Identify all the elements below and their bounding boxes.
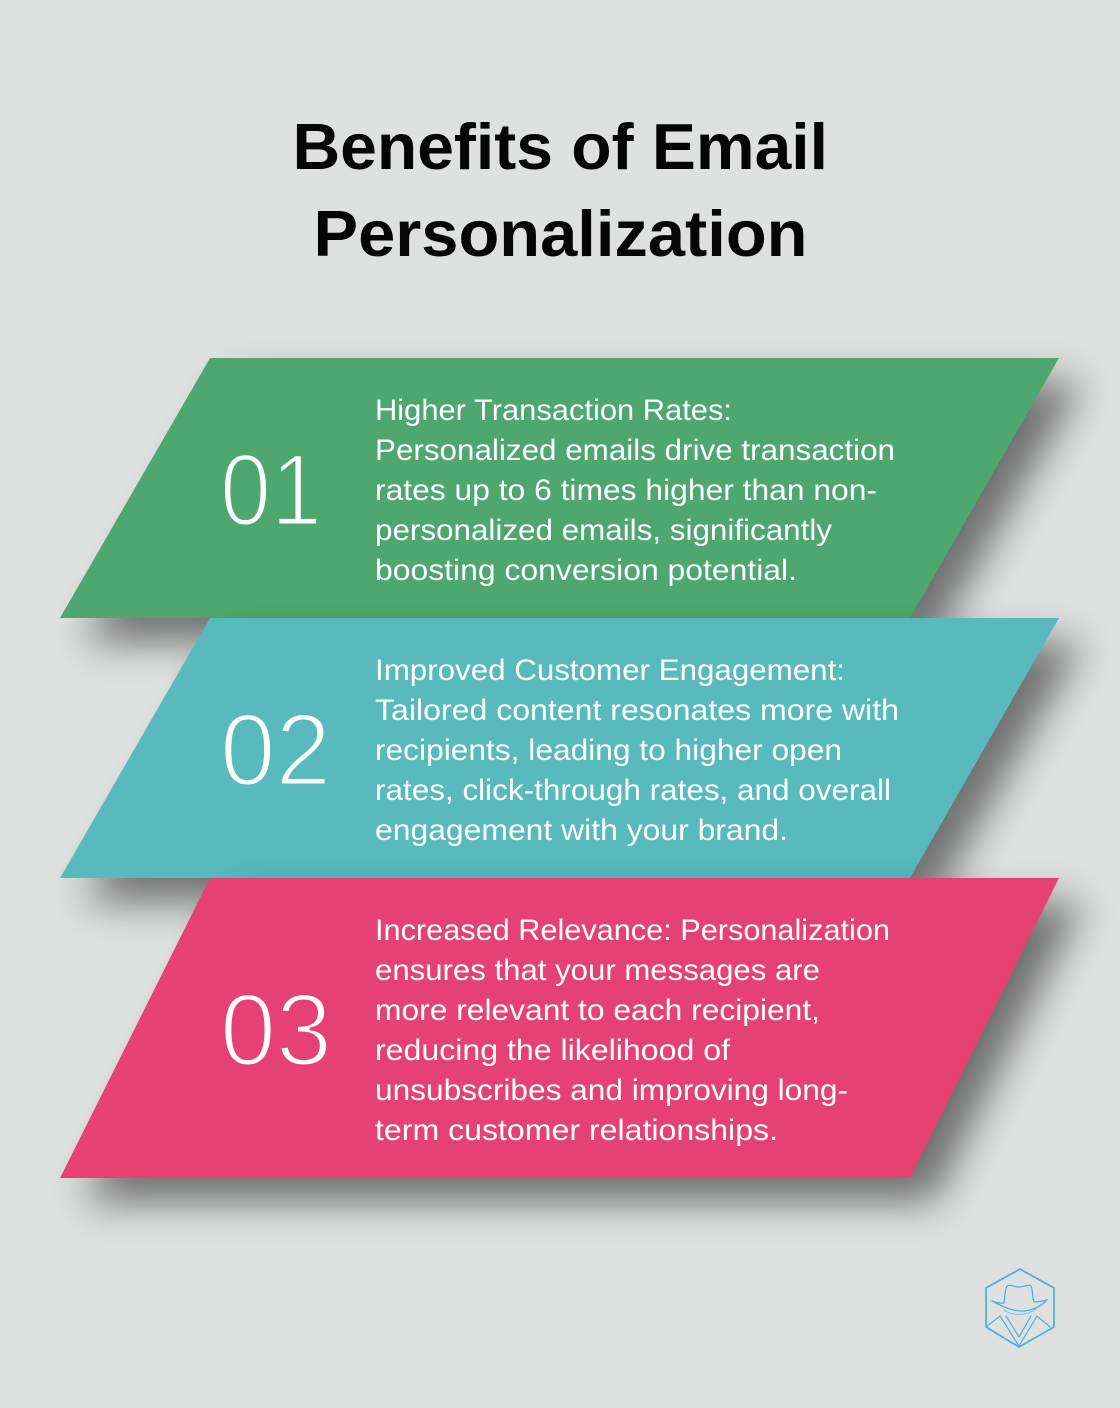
text: higher transaction rates: boosting conversion potential. — [375, 554, 797, 587]
teal parallelogram — [60, 618, 1059, 878]
text: higher transaction rates: Higher Transaction Rates: — [375, 394, 732, 427]
title: Benefits of Email — [292, 110, 828, 183]
text: increased relevance: ensures that your messages are — [375, 954, 820, 987]
panel: 03 increased relevance — [60, 878, 1083, 1202]
title: Personalization — [314, 197, 808, 270]
text: increased relevance: Increased Relevance: Personalization — [375, 914, 890, 947]
text: improved customer engagement: Improved Customer Engagement: — [375, 654, 845, 687]
text: increased relevance: more relevant to each recipient, — [375, 994, 820, 1027]
icon: spy logo — [986, 1269, 1054, 1347]
green parallelogram — [60, 358, 1059, 618]
text: higher transaction rates: rates up to 6 times higher than non- — [375, 474, 877, 507]
text: higher transaction rates: personalized emails, significantly — [375, 514, 832, 547]
panel: 02 improved customer engagement — [60, 618, 1083, 902]
pink parallelogram — [60, 878, 1059, 1178]
text: increased relevance: term customer relationships. — [375, 1114, 778, 1147]
text: improved customer engagement: rates, click-through rates, and overall — [375, 774, 891, 807]
number 03: 03 — [220, 973, 332, 1087]
number 02: 02 — [220, 693, 331, 807]
text: improved customer engagement: engagement with your brand. — [375, 814, 788, 847]
text: higher transaction rates: Personalized emails drive transaction — [375, 434, 895, 467]
text: higher transaction rates — [375, 394, 895, 587]
text: increased relevance: unsubscribes and improving long- — [375, 1074, 848, 1107]
text: increased relevance: reducing the likelihood of — [375, 1034, 731, 1067]
title — [292, 110, 828, 270]
text: increased relevance — [375, 914, 890, 1147]
text: improved customer engagement — [375, 654, 899, 847]
text: improved customer engagement: Tailored content resonates more with — [375, 694, 899, 727]
text: improved customer engagement: recipients, leading to higher open — [375, 734, 842, 767]
number 01: 01 — [220, 433, 322, 547]
panel: 01 higher transaction rates — [60, 358, 1083, 642]
